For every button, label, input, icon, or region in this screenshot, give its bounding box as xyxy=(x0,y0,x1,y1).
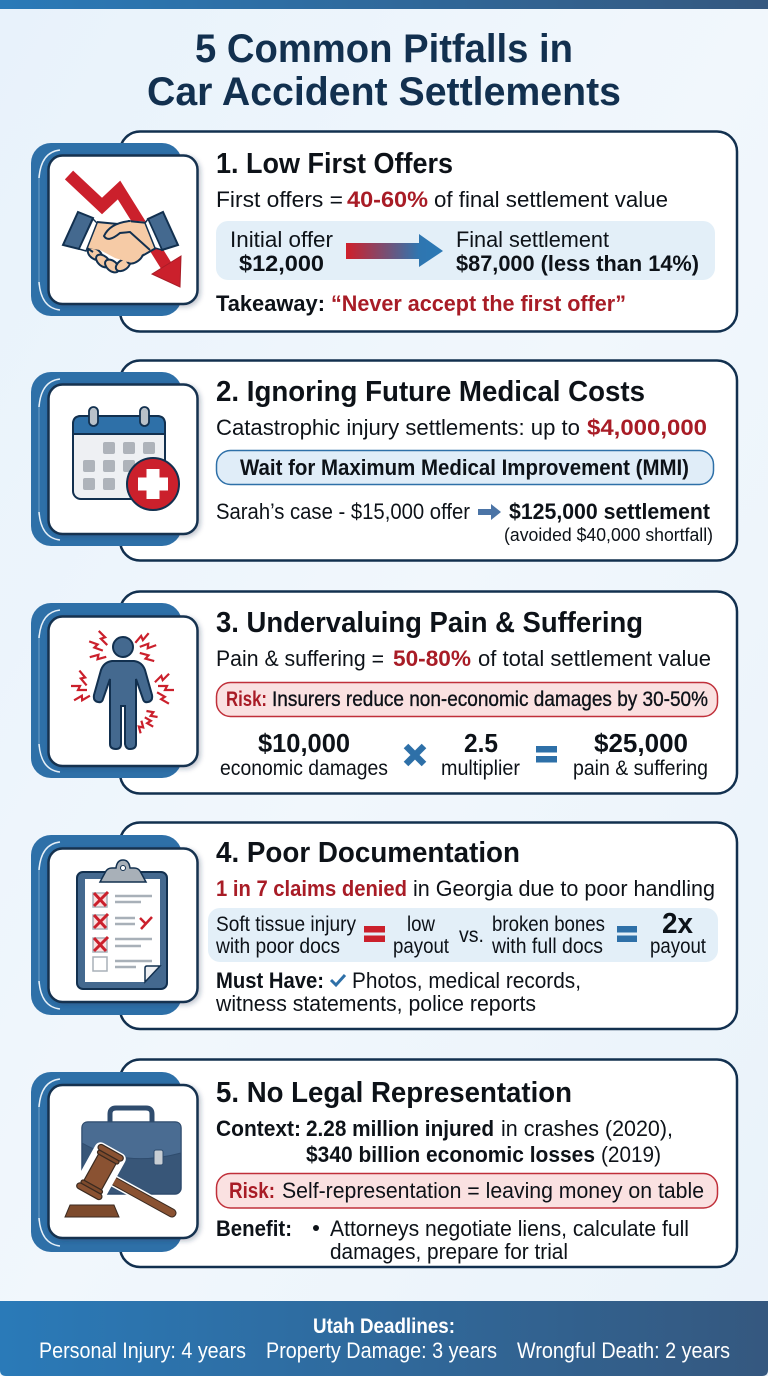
statistic line: in Georgia due to poor handling xyxy=(413,876,715,901)
statistic line: Pain & suffering = xyxy=(216,646,384,671)
arrow: offer to settlement xyxy=(346,234,443,267)
panel: 2. ignoring future medical costs xyxy=(31,360,737,560)
context: (2019) xyxy=(601,1142,661,1167)
icon: person with pain bolts xyxy=(71,631,174,749)
comparison strip xyxy=(208,908,718,962)
comparison strip: Soft tissue injury xyxy=(216,912,356,936)
formula: economic damages xyxy=(220,756,388,780)
callout: MMI: Wait for Maximum Medical Improvement (MMI) xyxy=(240,455,689,480)
context: 2.28 million injured xyxy=(306,1116,494,1141)
statistic line: 50-80% xyxy=(393,646,471,671)
case example: $125,000 settlement xyxy=(509,499,710,524)
case example xyxy=(216,499,713,545)
comparison strip: $12,000 xyxy=(239,251,324,276)
statistic line: of total settlement value xyxy=(478,646,711,671)
benefit: damages, prepare for trial xyxy=(330,1239,568,1264)
title: Car Accident Settlements xyxy=(147,70,621,114)
callout: risk: Risk: xyxy=(226,687,267,711)
callout: risk xyxy=(216,682,718,716)
comparison strip: $87,000 (less than 14%) xyxy=(456,251,699,276)
icon: calendar with medical cross xyxy=(73,407,179,510)
context: in crashes (2020), xyxy=(501,1116,673,1141)
comparison strip: Final settlement xyxy=(456,227,610,252)
statistic line: $4,000,000 xyxy=(587,415,707,440)
heading: 5. No Legal Representation xyxy=(216,1077,572,1109)
callout: risk xyxy=(216,1174,718,1208)
footer: Utah deadlines: Personal Injury: 4 years xyxy=(39,1338,246,1363)
context xyxy=(216,1116,673,1167)
must have list: witness statements, police reports xyxy=(215,991,536,1016)
statistic line: 1 in 7 claims denied xyxy=(216,876,407,901)
icon: briefcase and gavel xyxy=(65,1108,181,1217)
callout: risk: Risk: xyxy=(229,1178,275,1203)
footer: Utah deadlines: Wrongful Death: 2 years xyxy=(517,1338,730,1363)
title xyxy=(147,27,621,114)
comparison strip: with poor docs xyxy=(215,934,340,958)
comparison strip: payout xyxy=(393,934,449,958)
comparison strip xyxy=(216,221,715,280)
heading: 2. Ignoring Future Medical Costs xyxy=(216,376,645,408)
comparison strip: payout xyxy=(650,934,706,958)
comparison strip: broken bones xyxy=(492,912,605,936)
heading: 1. Low First Offers xyxy=(216,148,453,180)
formula: $10,000 xyxy=(258,728,350,758)
formula xyxy=(220,728,708,780)
comparison strip: 2x xyxy=(662,908,693,940)
benefit: Benefit: xyxy=(216,1216,292,1241)
benefit: Attorneys negotiate liens, calculate full xyxy=(330,1216,689,1241)
callout: risk: Insurers reduce non-economic damages by 30-50% xyxy=(272,687,708,711)
must have list: Photos, medical records, xyxy=(352,968,581,993)
takeaway xyxy=(216,291,626,316)
formula: $25,000 xyxy=(594,728,688,758)
benefit xyxy=(216,1216,689,1264)
callout: MMI xyxy=(216,450,714,484)
footer: Utah deadlines: Property Damage: 3 years xyxy=(266,1338,497,1363)
must have list xyxy=(215,968,581,1016)
footer: Utah deadlines xyxy=(0,1301,768,1376)
statistic line xyxy=(216,876,715,901)
statistic line xyxy=(216,187,668,212)
formula: pain & suffering xyxy=(573,756,708,780)
comparison strip: with full docs xyxy=(491,934,603,958)
footer: Utah deadlines: Utah Deadlines: xyxy=(313,1315,455,1338)
heading: 3. Undervaluing Pain & Suffering xyxy=(216,607,643,639)
panel: 5. no legal representation xyxy=(31,1060,737,1267)
statistic line: of final settlement value xyxy=(434,187,668,212)
arrow: case outcome xyxy=(478,504,501,520)
formula: 2.5 xyxy=(464,728,498,758)
panel: 1. low first offers xyxy=(31,132,737,332)
statistic line: First offers = xyxy=(216,187,343,212)
takeaway: Takeaway: xyxy=(216,291,325,316)
takeaway: “Never accept the first offer” xyxy=(331,291,626,316)
must have list: Must Have: xyxy=(216,968,324,993)
context: Context: xyxy=(216,1116,301,1141)
icon: handshake with falling arrow xyxy=(63,175,181,287)
formula: multiplier xyxy=(441,756,520,780)
case example: (avoided $40,000 shortfall) xyxy=(504,525,713,545)
panel: 4. poor documentation xyxy=(31,822,737,1029)
statistic line xyxy=(216,646,711,671)
case example: Sarah’s case - $15,000 offer xyxy=(216,499,470,524)
comparison strip: vs. xyxy=(459,923,484,947)
title: 5 Common Pitfalls in xyxy=(195,27,573,71)
panel: 3. undervaluing pain and suffering xyxy=(31,592,737,794)
comparison strip: Initial offer xyxy=(230,227,333,252)
heading: 4. Poor Documentation xyxy=(216,837,520,869)
callout: risk: Self-representation = leaving money on table xyxy=(282,1178,704,1203)
context: $340 billion economic losses xyxy=(306,1142,595,1167)
icon: clipboard checklist xyxy=(77,860,167,989)
statistic line: 40-60% xyxy=(347,187,428,212)
comparison strip: low xyxy=(407,912,435,936)
statistic line: Catastrophic injury settlements: up to xyxy=(216,415,580,440)
